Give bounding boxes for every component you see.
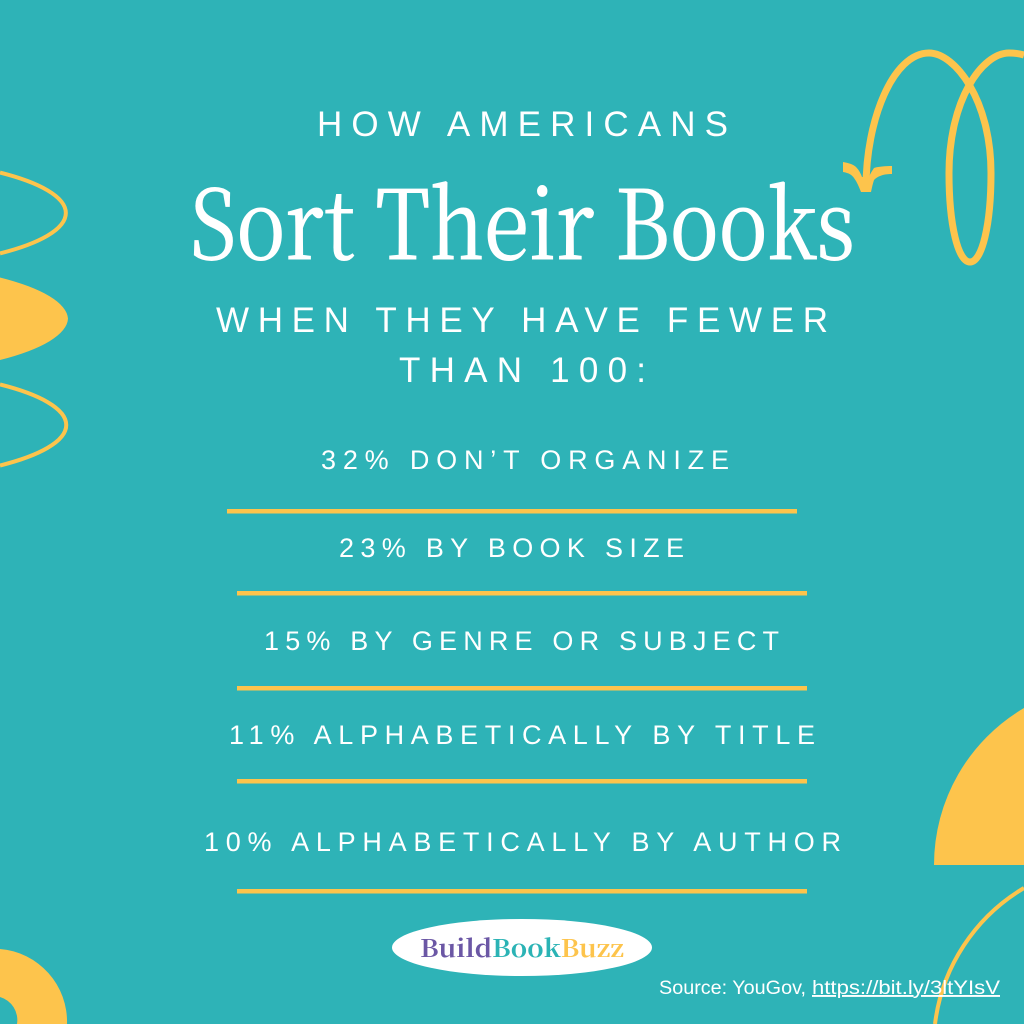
logo: BuildBookBuzz (392, 919, 652, 976)
row: 23% by book size: 23% BY BOOK SIZE (339, 533, 684, 563)
logo: BuildBookBuzz: Build Book Buzz (420, 929, 624, 964)
source credit (659, 978, 1000, 999)
decoration: lower right arc (935, 888, 1024, 1024)
row: 15% by genre or subject: 15% BY GENRE OR SUBJECT (264, 626, 779, 656)
row: 32% don't organize: 32% DON’T ORGANIZE (321, 445, 729, 475)
heading line: how americans: HOW AMERICANS (317, 105, 728, 144)
divider 4 (237, 779, 807, 784)
decoration: left ellipses (0, 173, 68, 466)
divider 1 (227, 509, 797, 514)
divider 5 (237, 889, 807, 894)
list of sorting methods (204, 445, 841, 894)
decoration: right half circle (934, 708, 1024, 865)
divider 3 (237, 686, 807, 690)
decoration: looping arrow (843, 53, 1024, 262)
divider 2 (237, 591, 807, 596)
heading block (190, 105, 855, 390)
source credit: https://bit.ly/3ltYIsV (812, 978, 1000, 999)
decoration: bottom left ring (0, 949, 67, 1024)
source credit: Source: YouGov, (659, 978, 806, 999)
subtitle line 1: WHEN THEY HAVE FEWER (216, 301, 828, 340)
subtitle line 2: THAN 100: (399, 351, 646, 390)
row: 10% alphabetically by author: 10% ALPHABETICALLY BY AUTHOR (204, 827, 841, 857)
title: Sort Their Books (190, 150, 855, 287)
row: 11% alphabetically by title: 11% ALPHABETICALLY BY TITLE (229, 720, 815, 750)
